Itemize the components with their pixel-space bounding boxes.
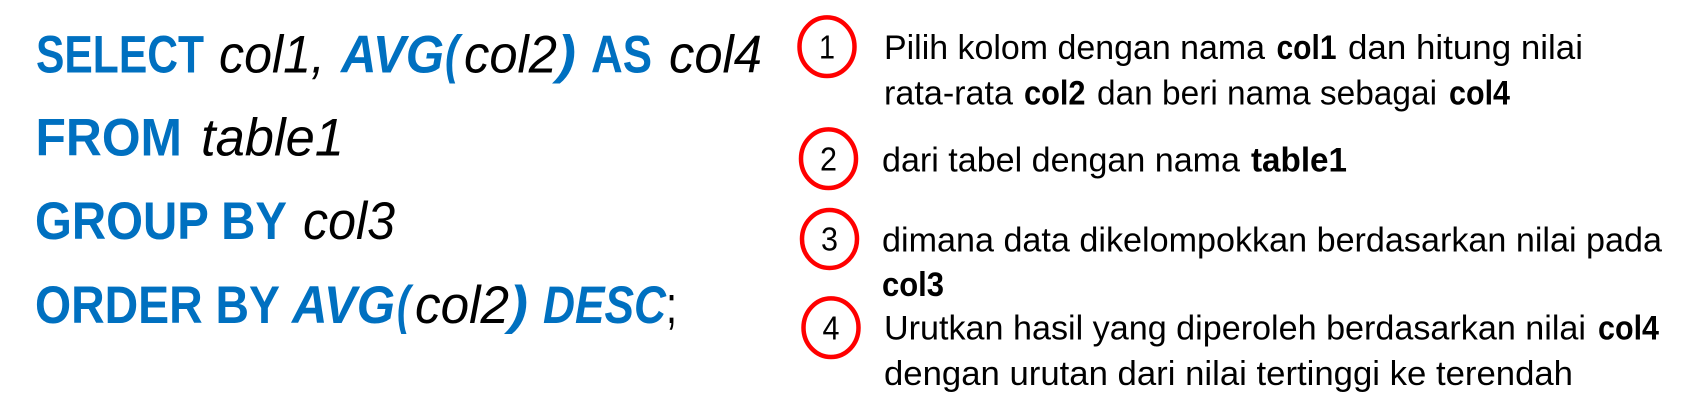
badge 1 xyxy=(800,17,854,76)
badge 2 xyxy=(801,129,856,188)
SQL line: SELECT: AS xyxy=(591,26,652,84)
explanation 3 xyxy=(882,222,1662,304)
SQL line: FROM: table1 xyxy=(201,108,344,168)
badge 2: 2 xyxy=(820,140,837,178)
panel: SQL query xyxy=(35,26,762,335)
SQL line: SELECT: AVG xyxy=(339,26,444,84)
explanation 4 xyxy=(884,309,1659,393)
SQL line: FROM xyxy=(36,108,344,168)
SQL line: ORDER BY: ) xyxy=(504,276,528,335)
badge 3 xyxy=(802,210,857,268)
SQL line: ORDER BY: ( xyxy=(397,276,414,335)
SQL line: SELECT: col2 xyxy=(464,26,557,84)
badge 3: 3 xyxy=(821,221,838,258)
explanation 1: rata-rata xyxy=(884,74,1013,112)
SQL line: GROUP BY: GROUP BY xyxy=(35,192,287,251)
SQL line: ORDER BY: AVG xyxy=(290,276,395,335)
SQL line: GROUP BY: col3 xyxy=(303,192,395,251)
explanation 4: col4 xyxy=(1598,309,1659,347)
step 4 xyxy=(804,298,1659,393)
explanation 2: table1 xyxy=(1251,142,1347,180)
explanation 3: col3 xyxy=(882,266,944,304)
explanation 4: dengan urutan dari nilai tertinggi ke terendah xyxy=(884,355,1573,393)
explanation 1: col2 xyxy=(1024,74,1086,112)
SQL line: SELECT: ( xyxy=(445,26,463,84)
explanation 1 xyxy=(884,29,1583,112)
step 2 xyxy=(801,129,1347,188)
SQL line: ORDER BY xyxy=(35,276,677,335)
explanation 1: Pilih kolom dengan nama xyxy=(884,29,1265,67)
badge 4: 4 xyxy=(822,309,840,346)
explanation 1: col1 xyxy=(1276,29,1336,67)
panel: explanations xyxy=(800,17,1662,393)
SQL line: SELECT: SELECT xyxy=(36,26,204,84)
explanation 1: col4 xyxy=(1449,74,1510,112)
SQL line: ORDER BY: col2 xyxy=(415,276,509,335)
SQL line: SELECT: col1, xyxy=(219,26,325,84)
explanation 4: Urutkan hasil yang diperoleh berdasarkan nilai xyxy=(884,309,1586,347)
SQL line: SELECT: ) xyxy=(552,26,576,84)
badge 4 xyxy=(804,298,858,357)
explanation 2: dari tabel dengan nama xyxy=(882,142,1240,180)
explanation 3: dimana data dikelompokkan berdasarkan nilai pada xyxy=(882,222,1662,260)
step 3 xyxy=(802,210,1662,304)
SQL line: ORDER BY: ORDER BY xyxy=(35,276,280,335)
SQL line: SELECT: col4 xyxy=(669,26,762,84)
explanation 1: dan beri nama sebagai xyxy=(1097,74,1437,112)
SQL line: FROM: FROM xyxy=(36,108,182,168)
explanation 1: dan hitung nilai xyxy=(1348,29,1583,67)
SQL line: ORDER BY: ; xyxy=(666,276,677,335)
badge 1: 1 xyxy=(819,28,835,66)
step 1 xyxy=(800,17,1583,112)
SQL line: ORDER BY: DESC xyxy=(543,276,667,335)
SQL line: SELECT xyxy=(36,26,762,84)
